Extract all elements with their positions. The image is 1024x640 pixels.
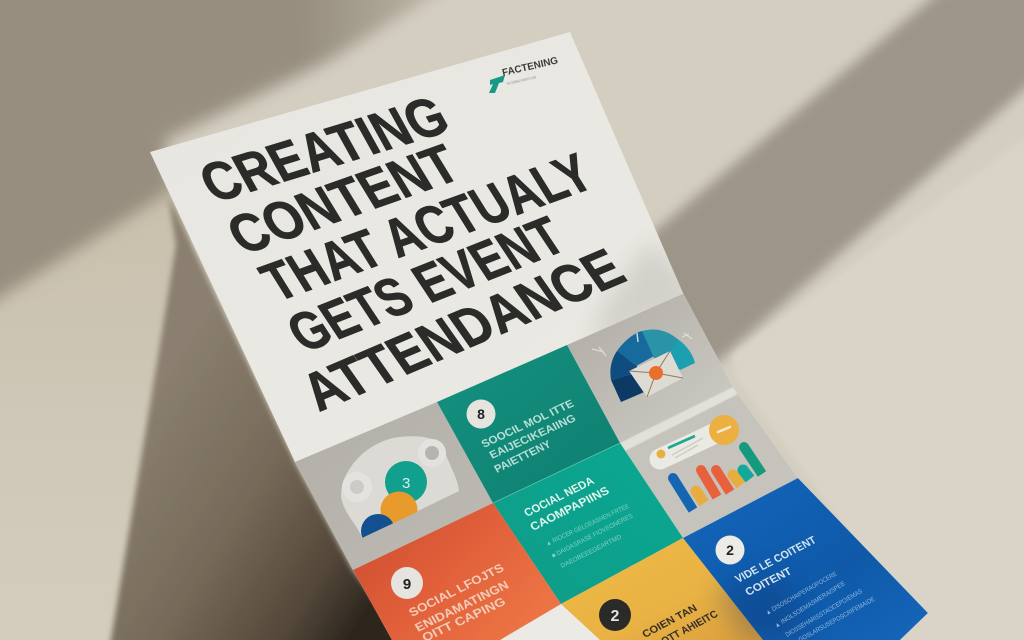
panel: email icon background	[567, 293, 733, 443]
panel: orange card	[353, 503, 561, 640]
card text: orange 9: SOCIAL LFOJTS	[406, 561, 506, 620]
logo tagline: FACTENING EVENTS COM	[506, 75, 537, 86]
card text: teal 8	[466, 398, 578, 476]
card text: social media campaigns: DAEOBEEEGEARTMD	[560, 534, 623, 570]
panel: community icon background	[295, 402, 493, 570]
icon: community bubbles: 3	[402, 475, 410, 492]
white blob	[341, 436, 459, 538]
icon: community bubbles	[341, 436, 459, 548]
lit lower-left wall	[0, 150, 190, 640]
bars	[668, 442, 762, 510]
card text: yellow 2: COIEN TAN	[640, 602, 700, 640]
card text: blue video content: 2	[726, 542, 734, 558]
card text: blue video content: ▲ DISOSCHAIPERAOPOCERE	[765, 570, 839, 617]
card text: blue video content: ▲ INOLSOEMASMERAISPEE	[773, 580, 847, 630]
title: CREATING	[189, 85, 459, 214]
card text: blue video content: DIOSSEHARISSTAOCEPOIEMAS	[784, 588, 864, 639]
card text: social media campaigns: CAOMPAPIINS	[528, 485, 612, 534]
card text: teal 8: PAIETTENY	[492, 438, 554, 476]
card text: teal 8: 8	[477, 406, 485, 422]
panel: blue card	[683, 478, 928, 640]
soft shadow on paper	[592, 244, 684, 333]
icon: email gauge	[592, 329, 695, 402]
card text: teal 8: SOOCIL MOL ITTE	[479, 398, 576, 451]
card text: teal 8: EAIJECIKEAIING	[488, 413, 578, 462]
card text: yellow 2	[599, 599, 721, 640]
card text: orange 9: 9	[403, 576, 411, 593]
panel: teal card social media	[493, 443, 683, 604]
poster paper	[150, 32, 928, 640]
card text: blue video content: VIDE LE COITENT	[733, 534, 819, 586]
title: GETS EVENT	[276, 206, 576, 363]
panel: yellow card	[561, 538, 763, 640]
poster	[150, 32, 928, 640]
envelope	[629, 351, 683, 397]
card text: yellow 2: 2	[611, 608, 620, 625]
title: ATTENDANCE	[289, 238, 636, 422]
title: THAT ACTUALY	[250, 142, 604, 312]
title: CONTENT	[216, 133, 470, 265]
lit lower-right wall	[733, 90, 1024, 640]
card text: social media campaigns: ■ DAIOASRASE FIOVEONERES	[551, 512, 635, 560]
panel: teal card 8	[437, 345, 620, 503]
card text: blue video content: COITENT	[743, 566, 794, 599]
card text: orange 9: ENIDAMATINGN	[412, 578, 511, 635]
dark diagonal band	[620, 0, 1024, 378]
card text: orange 9	[391, 561, 511, 640]
shadow under the poster	[106, 195, 430, 640]
card text: blue video content	[716, 534, 877, 640]
logo text: FACTENING	[501, 55, 559, 79]
card text: social media campaigns: COCIAL NEDA	[522, 475, 597, 520]
logo mark	[489, 75, 505, 93]
icon: bar chart with card	[656, 415, 762, 510]
panel: chart icon background	[620, 387, 798, 538]
title	[189, 85, 636, 422]
logo	[489, 55, 559, 93]
info pill	[656, 430, 722, 459]
card text: social media campaigns: ▲ RIOCER GELOEASHEN FRTEE	[545, 503, 631, 548]
dark upper-left wall	[0, 0, 520, 335]
card text: social media campaigns	[522, 475, 635, 570]
